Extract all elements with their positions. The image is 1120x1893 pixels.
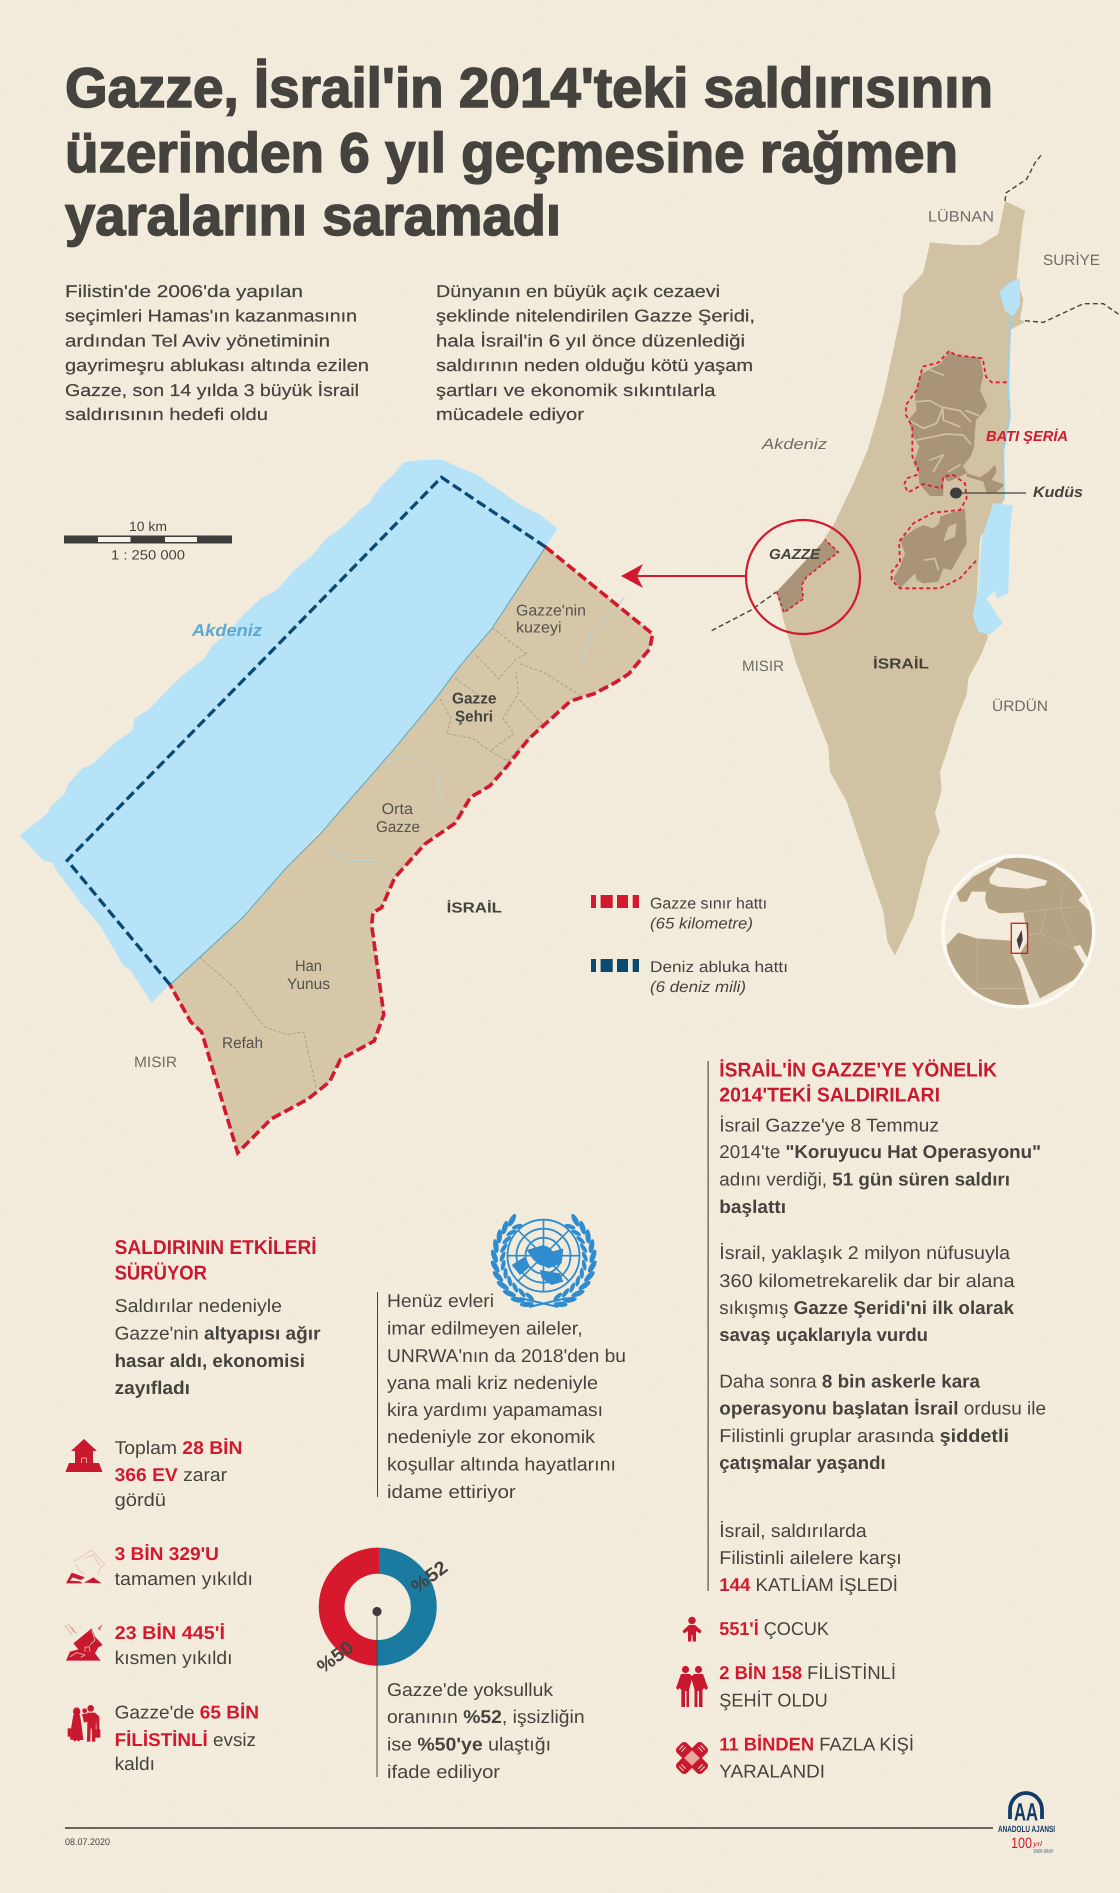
- border lines: [712, 155, 1119, 631]
- stat: wounded: 11 BİNDEN FAZLA KİŞİ: [719, 1734, 914, 1755]
- Gaza map labels: MISIR: [134, 1054, 177, 1071]
- map labels: BATI ŞERİA: [986, 428, 1068, 445]
- intro text right: saldırının neden olduğu kötü yaşam: [436, 356, 753, 375]
- Gaza map labels: Gazze: [376, 819, 420, 836]
- legend: Gaza border: (65 kilometre): [650, 916, 753, 932]
- text block: UNRWA: Henüz evleri: [387, 1290, 494, 1311]
- sea area: [20, 460, 557, 1003]
- Gaza map labels: Han: [295, 958, 322, 975]
- title: [65, 56, 993, 247]
- icon: United Nations emblem: [489, 1211, 599, 1312]
- paragraph: massacres: [719, 1520, 902, 1595]
- text block: UNRWA: idame ettiriyor: [387, 1481, 516, 1502]
- heading: 2014'TEKİ SALDIRILARI: [719, 1083, 940, 1106]
- stat: children: 551'İ ÇOCUK: [719, 1618, 830, 1639]
- intro text left: Filistin'de 2006'da yapılan: [65, 282, 303, 301]
- stat: killed: ŞEHİT OLDU: [719, 1690, 828, 1711]
- intro text left: saldırısının hedefi oldu: [65, 405, 268, 424]
- text block: UNRWA: UNRWA'nın da 2018'den bu: [387, 1345, 626, 1366]
- paragraph: ground operation: çatışmalar yaşandı: [719, 1452, 886, 1473]
- Gaza map labels: Orta: [382, 801, 413, 818]
- title: yaralarını saramadı: [65, 184, 561, 247]
- text block: UNRWA: [377, 1290, 626, 1502]
- paragraph: air strikes: İsrail, yaklaşık 2 milyon nüfusuyla: [719, 1242, 1011, 1263]
- stat: homeless: Gazze'de 65 BİN: [115, 1702, 259, 1722]
- stat: homeless: [68, 1702, 259, 1774]
- Gaza map labels: Yunus: [287, 976, 330, 993]
- map labels: ÜRDÜN: [992, 698, 1048, 715]
- stat: fully destroyed: [66, 1543, 253, 1589]
- legend: sea blockade: [591, 959, 788, 996]
- logo: Anadolu Ajansi: 100: [1011, 1835, 1032, 1852]
- paragraph: operation: 2014'te "Koruyucu Hat Operasyonu": [719, 1141, 1041, 1162]
- map labels: Kudüs: [1033, 484, 1083, 501]
- heading: [719, 1058, 998, 1106]
- intro text left: seçimleri Hamas'ın kazanmasının: [65, 307, 357, 326]
- donut chart: %50: [313, 1637, 358, 1678]
- logo: Anadolu Ajansi: ANADOLU AJANSI: [998, 1824, 1055, 1834]
- stat: damaged homes: [66, 1437, 242, 1510]
- Jerusalem marker: [950, 488, 1026, 498]
- intro text right: hala İsrail'in 6 yıl önce düzenlediği: [436, 332, 745, 350]
- legend: sea blockade: Deniz abluka hattı: [650, 959, 788, 976]
- heading: SÜRÜYOR: [115, 1262, 208, 1285]
- stat: children: [682, 1617, 830, 1642]
- map labels: Akdeniz: [761, 436, 828, 453]
- map labels: MISIR: [742, 658, 784, 675]
- description: hasar aldı, ekonomisi: [115, 1350, 305, 1371]
- paragraph: massacres: İsrail, saldırılarda: [719, 1520, 867, 1541]
- stat: wounded: [667, 1733, 914, 1783]
- intro text left: [65, 282, 369, 424]
- heading: SALDIRININ ETKİLERİ: [115, 1236, 317, 1259]
- map: Israel and Palestine overview: [621, 155, 1119, 955]
- map labels: LÜBNAN: [928, 208, 994, 226]
- Gaza border dashed line: [170, 547, 653, 1153]
- paragraph: operation: başlattı: [719, 1196, 786, 1217]
- stat: fully destroyed: 3 BİN 329'U: [115, 1543, 219, 1564]
- text block: poverty and unemployment: oranının %52, işsizliğin: [387, 1706, 585, 1727]
- callout circle and arrow: [621, 520, 860, 634]
- text block: poverty and unemployment: ifade ediliyor: [387, 1761, 500, 1782]
- description: Saldırılar nedeniyle: [115, 1295, 282, 1316]
- text block: poverty and unemployment: Gazze'de yoksulluk: [387, 1679, 554, 1700]
- description: [115, 1295, 320, 1398]
- stat: killed: [676, 1662, 896, 1711]
- paragraph: ground operation: Daha sonra 8 bin askerle kara: [719, 1370, 981, 1392]
- logo: Anadolu Ajansi: yıl: [1032, 1840, 1043, 1848]
- text block: UNRWA: nedeniyle zor ekonomik: [387, 1426, 596, 1447]
- heading: İSRAİL'İN GAZZE'YE YÖNELİK: [719, 1058, 998, 1081]
- paragraph: massacres: 144 KATLİAM İŞLEDİ: [719, 1574, 898, 1595]
- stat: fully destroyed: tamamen yıkıldı: [115, 1568, 253, 1589]
- scale bar: 10 km: [129, 519, 167, 534]
- intro text left: ardından Tel Aviv yönetiminin: [65, 332, 330, 350]
- text block: UNRWA: kira yardımı yapamaması: [387, 1399, 603, 1420]
- locator globe: [943, 856, 1100, 1010]
- Gaza map labels: Akdeniz: [191, 621, 263, 640]
- stat: homeless: FİLİSTİNLİ evsiz: [115, 1729, 256, 1750]
- heading: [115, 1236, 317, 1285]
- text block: poverty and unemployment: [387, 1679, 585, 1782]
- stat: killed: 2 BİN 158 FİLİSTİNLİ: [719, 1662, 896, 1683]
- Gaza map labels: Gazze: [452, 691, 497, 708]
- logo: Anadolu Ajansi: [998, 1793, 1055, 1854]
- Gaza small: [777, 540, 838, 613]
- legend: Gaza border: Gazze sınır hattı: [650, 896, 767, 913]
- donut chart: [313, 1548, 452, 1777]
- title: Gazze, İsrail'in 2014'teki saldırısının: [65, 56, 993, 119]
- Gaza map labels: kuzeyi: [516, 620, 562, 636]
- stat: partly destroyed: [65, 1622, 233, 1668]
- West Bank territory: [892, 351, 1007, 588]
- panel: 2014 attacks: [667, 1058, 1046, 1783]
- map labels: [742, 208, 1100, 715]
- Gaza map labels: Şehri: [455, 709, 493, 726]
- intro text right: Dünyanın en büyük açık cezaevi: [436, 282, 720, 301]
- stat: wounded: YARALANDI: [719, 1761, 825, 1782]
- intro text left: gayrimeşru ablukası altında ezilen: [65, 356, 369, 375]
- donut chart: %52: [407, 1557, 452, 1598]
- legend: sea blockade: (6 deniz mili): [650, 979, 746, 996]
- stat: damaged homes: gördü: [115, 1489, 166, 1510]
- logo: Anadolu Ajansi: 1920-2020: [1033, 1848, 1053, 1854]
- Gaza map labels: [134, 603, 586, 1071]
- paragraph: air strikes: sıkışmış Gazze Şeridi'ni ilk olarak: [719, 1297, 1015, 1318]
- logo: Anadolu Ajansi: AA: [1014, 1798, 1038, 1826]
- text block: poverty and unemployment: ise %50'ye ulaştığı: [387, 1734, 551, 1755]
- intro text left: Gazze, son 14 yılda 3 büyük İsrail: [65, 381, 359, 400]
- description: zayıfladı: [115, 1377, 190, 1398]
- stat: damaged homes: Toplam 28 BİN: [115, 1437, 242, 1458]
- Gaza map labels: Gazze'nin: [516, 603, 586, 620]
- paragraph: operation: [719, 1114, 1041, 1217]
- paragraph: air strikes: [719, 1242, 1015, 1345]
- Gaza map labels: İSRAİL: [447, 900, 502, 917]
- paragraph: operation: İsrail Gazze'ye 8 Temmuz: [719, 1114, 939, 1135]
- paragraph: air strikes: 360 kilometrekarelik dar bir alana: [719, 1270, 1015, 1291]
- legend: [591, 895, 788, 996]
- map labels: GAZZE: [769, 547, 821, 563]
- map labels: İSRAİL: [873, 656, 929, 672]
- stat: damaged homes: 366 EV zarar: [115, 1464, 227, 1485]
- intro text right: şeklinde nitelendirilen Gazze Şeridi,: [436, 307, 755, 326]
- Gaza map labels: Refah: [222, 1035, 263, 1052]
- paragraph: air strikes: savaş uçaklarıyla vurdu: [719, 1324, 928, 1345]
- paragraph: ground operation: Filistinli gruplar arasında şiddetli: [719, 1425, 1009, 1446]
- intro text right: [436, 282, 755, 424]
- paragraph: massacres: Filistinli ailelere karşı: [719, 1547, 902, 1568]
- legend: Gaza border: [591, 895, 767, 932]
- stat: partly destroyed: kısmen yıkıldı: [115, 1647, 232, 1668]
- sea blockade dashed line: [67, 477, 546, 985]
- stat: partly destroyed: 23 BİN 445'İ: [115, 1622, 225, 1643]
- paragraph: ground operation: [719, 1370, 1046, 1473]
- description: Gazze'nin altyapısı ağır: [115, 1322, 320, 1344]
- footer: 08.07.2020: [65, 1837, 110, 1848]
- map labels: SURİYE: [1043, 251, 1100, 269]
- map: Gaza Strip detail: [20, 460, 653, 1153]
- panel: effects of the attack: [65, 1236, 321, 1774]
- title: üzerinden 6 yıl geçmesine rağmen: [65, 121, 958, 184]
- scale bar: [64, 519, 232, 562]
- text block: UNRWA: imar edilmeyen aileler,: [387, 1318, 583, 1339]
- scale bar: 1 : 250 000: [111, 548, 185, 562]
- text block: UNRWA: yana mali kriz nedeniyle: [387, 1372, 598, 1393]
- land strip: [170, 547, 653, 1153]
- intro text right: şartları ve ekonomik sıkıntılarla: [436, 381, 716, 400]
- Israel land shape: [777, 201, 1025, 955]
- text block: UNRWA: koşullar altında hayatlarını: [387, 1454, 616, 1475]
- intro text right: mücadele ediyor: [436, 405, 584, 424]
- paragraph: operation: adını verdiği, 51 gün süren saldırı: [719, 1169, 1010, 1190]
- paragraph: ground operation: operasyonu başlatan İsrail ordusu ile: [719, 1398, 1046, 1419]
- stat: homeless: kaldı: [115, 1753, 155, 1774]
